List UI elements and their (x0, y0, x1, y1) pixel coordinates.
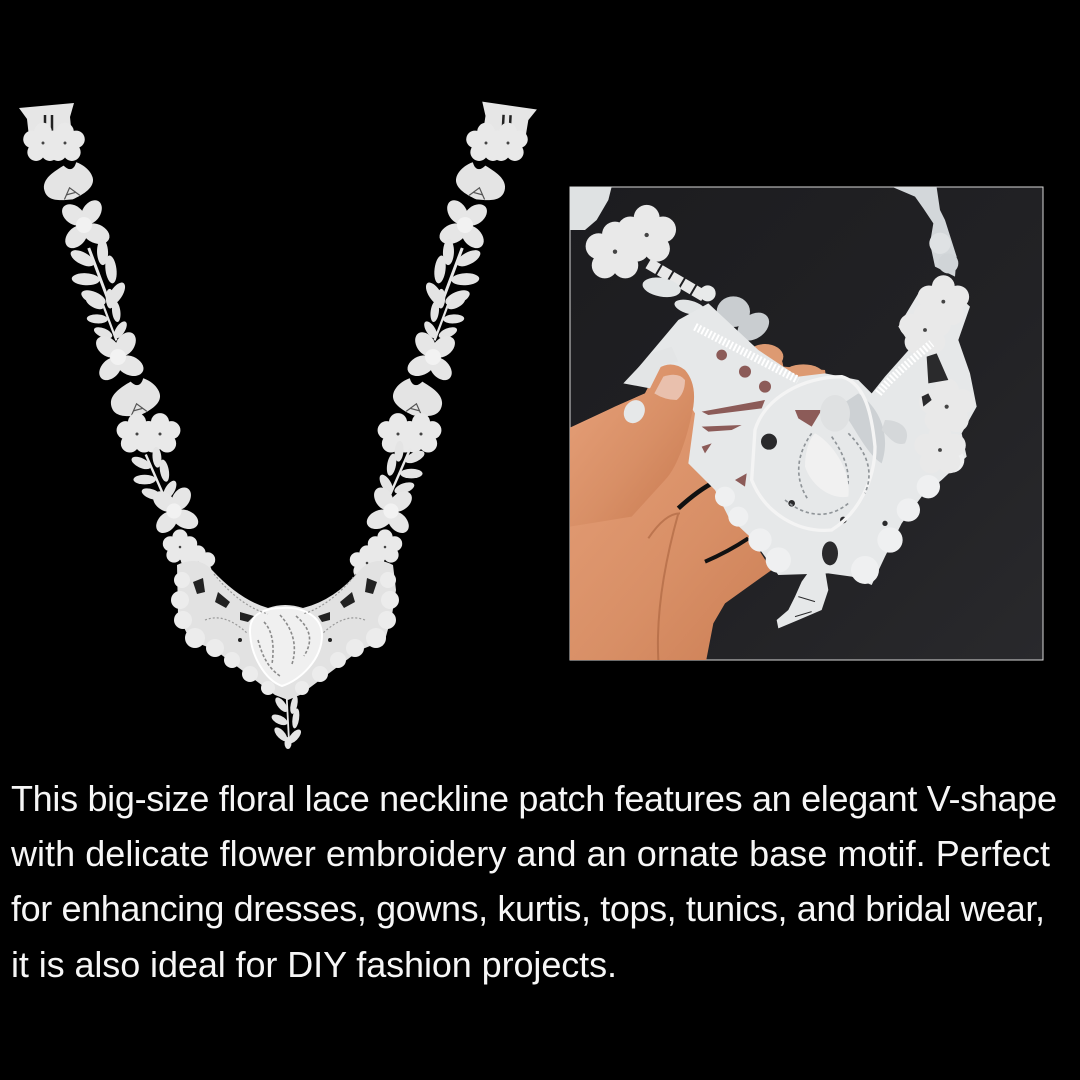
hand (565, 344, 828, 667)
lace tail drop (270, 695, 303, 749)
shaded fold (846, 394, 885, 463)
upper-left lace flowers (570, 187, 774, 346)
product description text: it is also ideal for DIY fashion projects. (11, 944, 617, 985)
product description text: for enhancing dresses, gowns, kurtis, tops, tunics, and bridal wear, (11, 888, 1045, 929)
rose motif (752, 377, 875, 530)
photo inset: lace held in hand (565, 187, 1043, 667)
lace openings (702, 350, 822, 487)
right lace strand (350, 102, 537, 579)
translucent right strap (893, 187, 958, 277)
lace border stitching (695, 327, 932, 393)
lace neckline patch (19, 102, 537, 749)
inset photo background (570, 187, 1043, 660)
folded lace tip (623, 364, 661, 424)
product description text: with delicate flower embroidery and an ornate base motif. Perfect (10, 833, 1050, 874)
product description text (10, 778, 1057, 985)
thumb over lace (570, 365, 694, 527)
product description text: This big-size floral lace neckline patch features an elegant V-shape (11, 778, 1057, 819)
infographic canvas (11, 102, 1056, 984)
main lace body (625, 275, 977, 585)
ornate base motif (171, 561, 399, 700)
left lace strand (19, 103, 215, 579)
right lace flowers (899, 275, 975, 473)
lace tail (777, 570, 828, 628)
